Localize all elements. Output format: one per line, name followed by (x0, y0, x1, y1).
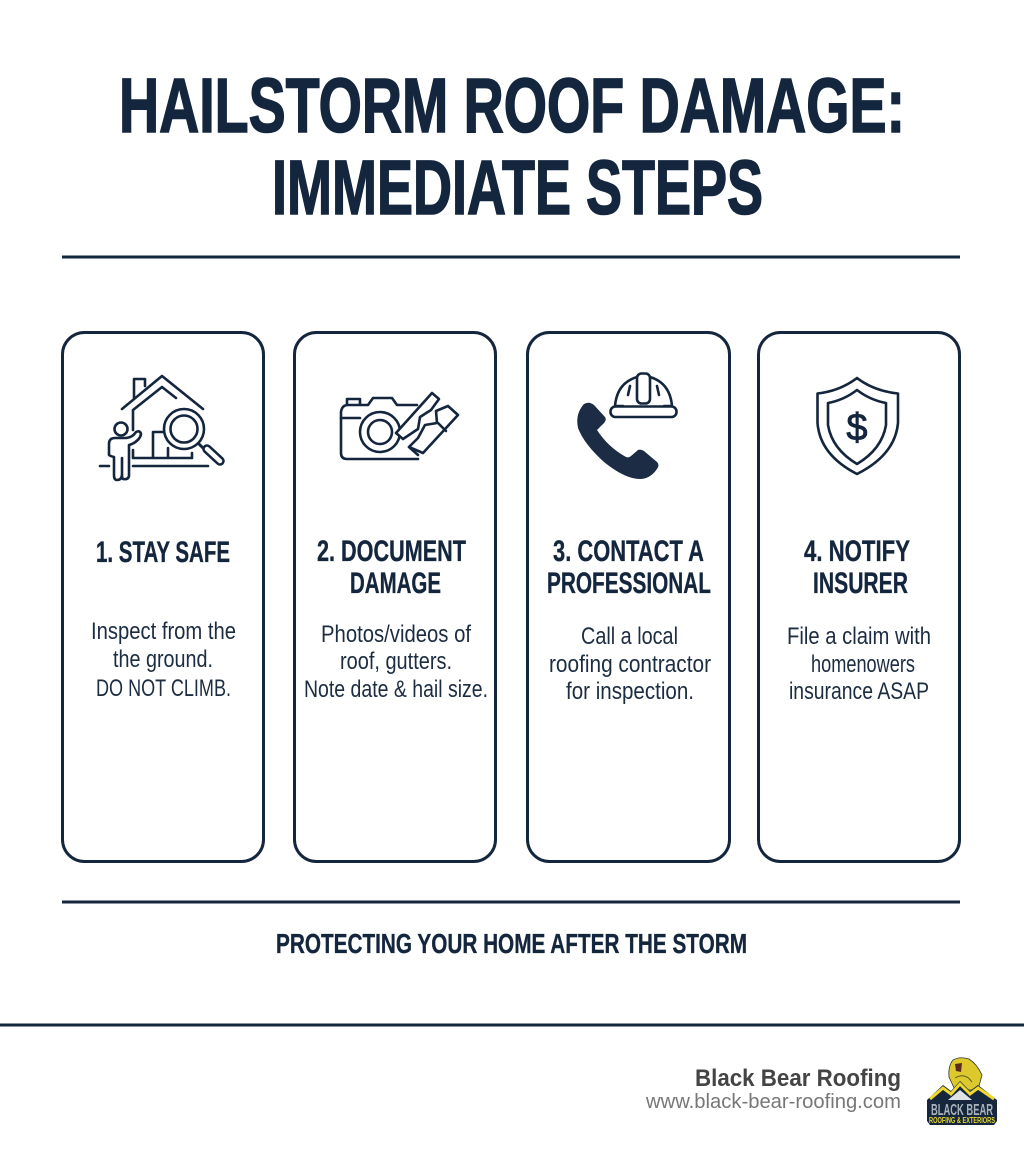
footer brand text (645, 1065, 901, 1113)
panel: step 1 stay safe (62, 332, 264, 862)
footer brand text: Black Bear Roofing (695, 1065, 901, 1092)
icon: house inspection (100, 376, 220, 480)
text: step 3 body: Call a local (581, 623, 678, 650)
logo: black bear roofing and exteriors: ROOFING & EXTERIORS (929, 1116, 995, 1125)
heading: step 2: 2. DOCUMENT (317, 535, 466, 568)
title (119, 63, 905, 231)
icon: shield with dollar: $ (846, 407, 868, 449)
panel: step 3 contact a professional (528, 332, 730, 862)
heading: step 4 (804, 535, 910, 600)
title: IMMEDIATE STEPS (272, 145, 763, 231)
heading: step 4: INSURER (813, 567, 908, 600)
text: step 3 body: for inspection. (566, 678, 694, 705)
text: step 2 body: Photos/videos of (321, 621, 471, 648)
text: step 4 body (787, 623, 931, 705)
logo: black bear roofing and exteriors (927, 1058, 997, 1125)
icon: shield with dollar (818, 378, 898, 474)
text: step 1 body: Inspect from the (91, 618, 236, 645)
text: step 1 body: DO NOT CLIMB. (96, 675, 231, 702)
icon: camera and broken shingle (341, 393, 458, 459)
icon: phone and hard hat (577, 374, 676, 479)
text: step 3 body: roofing contractor (549, 651, 711, 678)
text: step 4 body: homenowers (811, 651, 915, 678)
text: step 4 body: insurance ASAP (789, 678, 929, 705)
text: step 1 body (91, 618, 236, 702)
text: step 1 body: the ground. (113, 646, 213, 673)
text: step 4 body: File a claim with (787, 623, 931, 650)
heading: step 3: 3. CONTACT A (553, 535, 704, 568)
heading: step 3 (547, 535, 711, 600)
panel: step 4 notify insurer (758, 332, 960, 862)
heading: step 1: 1. STAY SAFE (96, 536, 230, 569)
text: step 2 body: Note date & hail size. (304, 676, 488, 703)
text: step 2 body: roof, gutters. (340, 648, 452, 675)
heading: step 2 (317, 535, 466, 600)
panel: step 2 document damage (294, 332, 496, 862)
text: step 3 body (549, 623, 711, 705)
heading: step 4: 4. NOTIFY (804, 535, 910, 568)
footer brand text: www.black-bear-roofing.com (645, 1091, 901, 1113)
heading: step 3: PROFESSIONAL (547, 567, 711, 600)
text: step 2 body (304, 621, 488, 703)
heading: step 2: DAMAGE (350, 567, 441, 600)
tagline: PROTECTING YOUR HOME AFTER THE STORM (276, 928, 747, 959)
